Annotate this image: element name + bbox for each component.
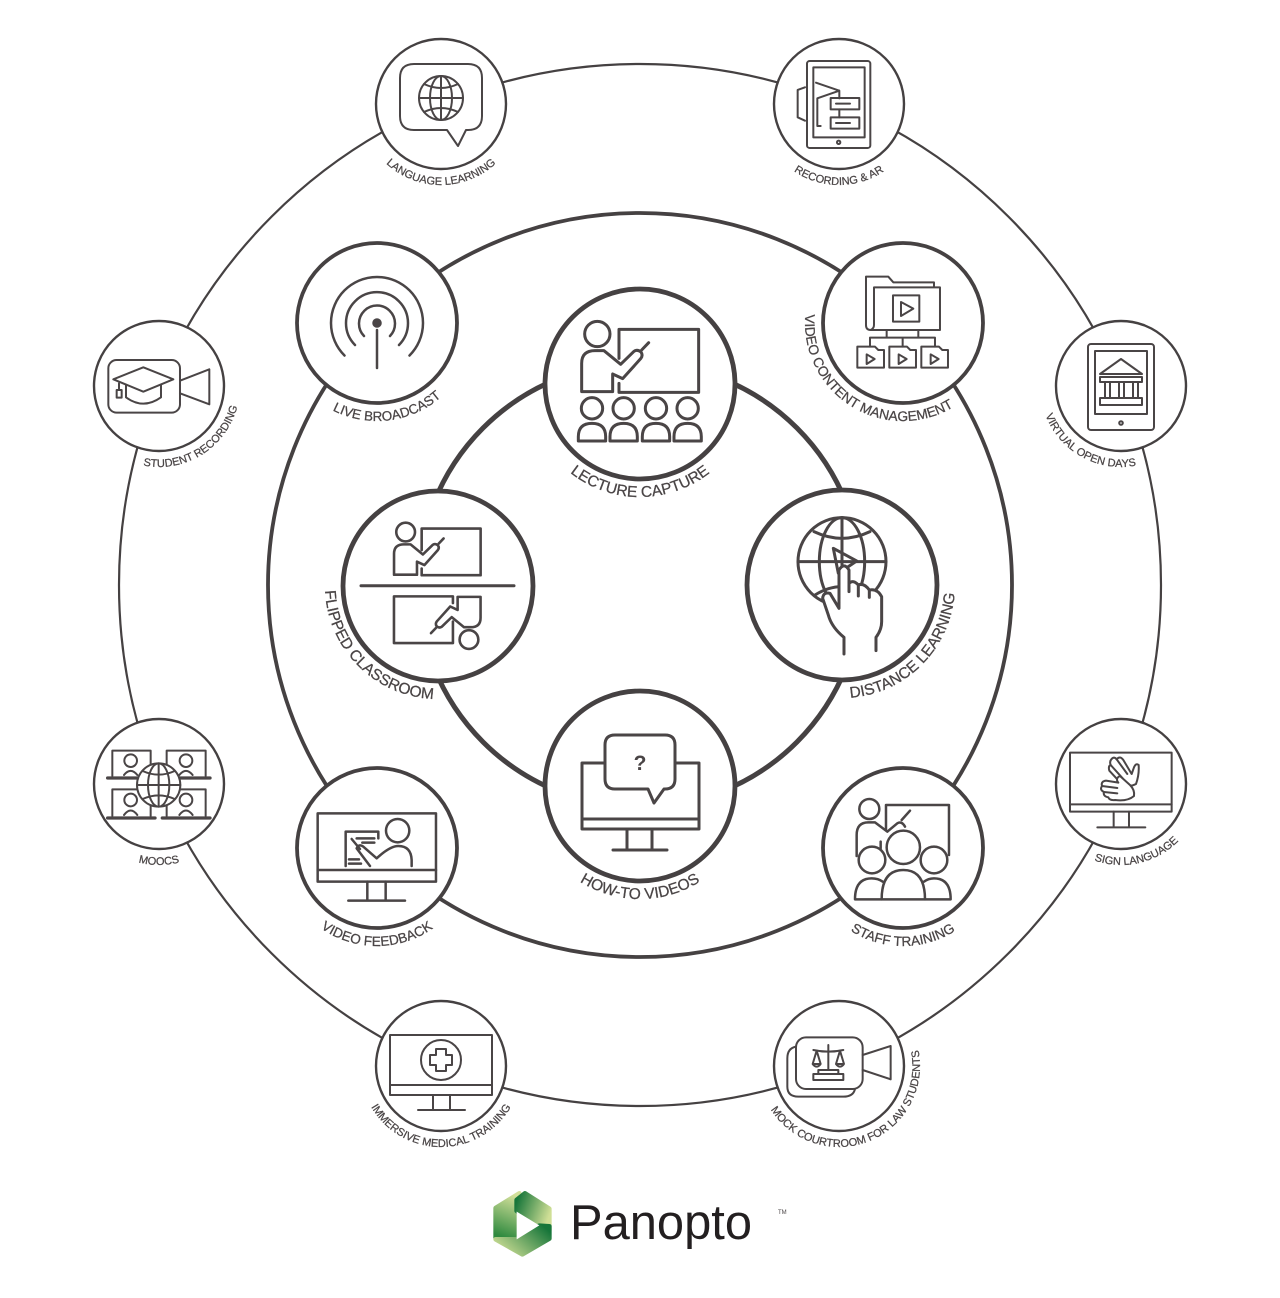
node: sign language xyxy=(1054,718,1188,866)
node: mock courtroom for law students xyxy=(771,1000,920,1148)
node: video content management xyxy=(804,241,985,422)
label: IMMERSIVE MEDICAL TRAINING xyxy=(371,1104,510,1148)
node: student recording xyxy=(92,320,237,468)
icon: monitor with medical cross xyxy=(390,1035,492,1110)
label: LECTURE CAPTURE xyxy=(570,464,710,498)
wordmark: Panopto xyxy=(570,1196,752,1250)
label: RECORDING & AR xyxy=(794,165,884,186)
logo mark xyxy=(496,1193,549,1254)
label: STUDENT RECORDING xyxy=(144,406,237,468)
icon: laptops around globe xyxy=(108,751,210,818)
label: VIDEO FEEDBACK xyxy=(324,920,434,946)
label: STAFF TRAINING xyxy=(852,924,954,946)
icon: globe in speech bubble xyxy=(400,64,482,146)
icon: tablet with AR xyxy=(798,61,870,148)
node: recording and AR xyxy=(772,38,906,186)
logo: Panopto xyxy=(496,1193,787,1254)
icon: video camera with scales xyxy=(787,1037,891,1097)
node: MOOCs xyxy=(92,718,226,866)
icon: teacher and students xyxy=(578,321,701,441)
label: MOOCS xyxy=(139,855,179,866)
icon: monitor with signing hands xyxy=(1070,753,1172,827)
middle ring xyxy=(268,213,1012,957)
icon: flipped teachers xyxy=(361,523,514,649)
node: staff training xyxy=(821,766,985,946)
node: live broadcast xyxy=(295,241,459,422)
label: FLIPPED CLASSROOM xyxy=(325,590,434,700)
icon: hand touching globe xyxy=(798,518,886,654)
trademark: TM xyxy=(778,1210,787,1216)
icon: video camera with graduation cap xyxy=(108,360,209,413)
node: video feedback xyxy=(295,766,459,946)
node: lecture capture xyxy=(542,286,738,498)
label: VIDEO CONTENT MANAGEMENT xyxy=(804,314,951,422)
node: flipped classroom xyxy=(325,488,536,700)
node: language learning xyxy=(374,38,508,186)
question mark: ? xyxy=(634,752,646,775)
label: LANGUAGE LEARNING xyxy=(386,158,495,186)
icon: tablet with building xyxy=(1088,344,1154,430)
label: MOCK COURTROOM FOR LAW STUDENTS xyxy=(771,1050,920,1148)
inner ring xyxy=(418,363,862,807)
node: immersive medical training xyxy=(371,1000,510,1148)
icon: teacher with group xyxy=(855,799,951,899)
outer ring xyxy=(119,64,1161,1106)
icon: monitor with question bubble xyxy=(582,735,699,850)
label: SIGN LANGUAGE xyxy=(1095,836,1178,866)
icon: folder hierarchy xyxy=(857,277,948,368)
node: how-to videos xyxy=(542,688,738,900)
icon: broadcast signal xyxy=(331,277,423,368)
icon: monitor with presenter xyxy=(318,813,436,901)
label: DISTANCE LEARNING xyxy=(850,594,954,698)
node: virtual open days xyxy=(1046,320,1188,468)
label: HOW-TO VIDEOS xyxy=(580,872,699,900)
label: LIVE BROADCAST xyxy=(333,390,439,422)
node: distance learning xyxy=(744,488,954,698)
label: VIRTUAL OPEN DAYS xyxy=(1046,412,1136,468)
